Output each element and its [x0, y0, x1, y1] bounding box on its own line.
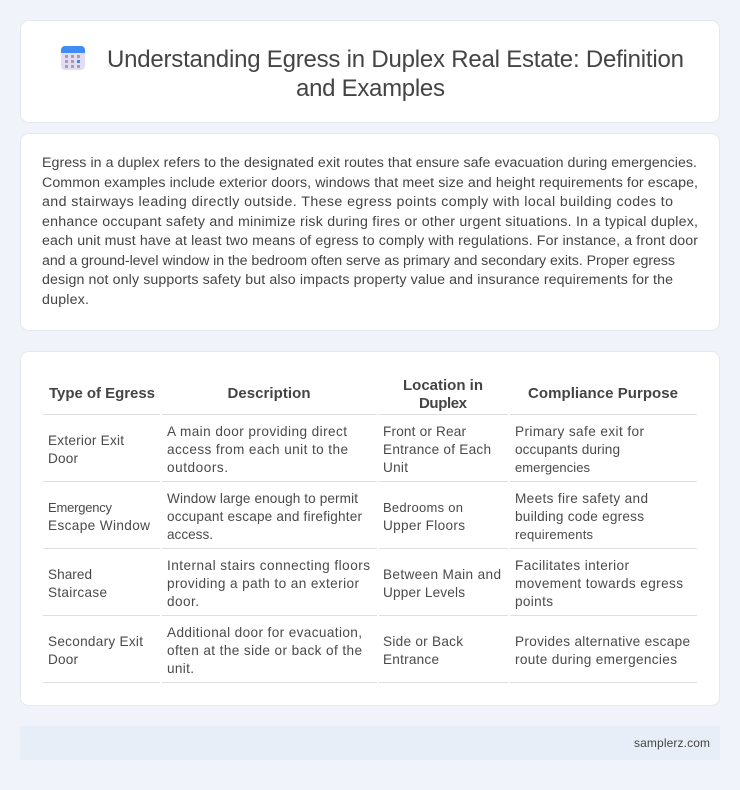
- table row: shared staircase: Between Main and: [383, 567, 501, 582]
- table row: emergency escape window: Meets fire safety and: [515, 491, 648, 506]
- table row: shared staircase: providing a path to an exterior: [167, 576, 359, 591]
- table row: exterior exit door: A main door providing direct: [167, 424, 347, 439]
- table row: secondary exit door: Door: [48, 652, 78, 667]
- table row: shared staircase: Upper Levels: [383, 585, 465, 600]
- table row: emergency escape window: Bedrooms on: [383, 500, 463, 515]
- table row: shared staircase: Internal stairs connecting floors: [167, 558, 370, 573]
- table header row: Duplex: [419, 395, 468, 412]
- text block: egress definition: and a ground-level window in the bedroom often serve as primary and secondary exits. Proper egress: [42, 253, 675, 269]
- panel: intro paragraph: [20, 134, 720, 330]
- table row: emergency escape window: Upper Floors: [383, 518, 465, 533]
- text block: egress definition: Common examples include exterior doors, windows that meet size and height requirements for escape,: [42, 175, 698, 191]
- text block: egress definition: duplex.: [42, 292, 89, 308]
- text block: egress definition: [42, 155, 698, 308]
- text block: egress definition: each unit must have at least two means of egress to comply with regulations. For instance, a front door: [42, 233, 698, 249]
- table row: shared staircase: points: [515, 594, 553, 609]
- text block: egress definition: enhance occupant safety and minimize risk during fires or other urgent situations. In a typical duplex,: [42, 214, 698, 230]
- table row: secondary exit door: route during emergencies: [515, 652, 677, 667]
- table row: emergency escape window: occupant escape and firefighter: [167, 509, 362, 524]
- table row: exterior exit door: emergencies: [515, 460, 590, 475]
- table row: emergency escape window: access.: [167, 527, 213, 542]
- table header row: Description: [228, 385, 310, 402]
- table row: secondary exit door: [48, 625, 690, 676]
- table header row: Compliance Purpose: [528, 385, 678, 402]
- table row: exterior exit door: Front or Rear: [383, 424, 466, 439]
- table row: secondary exit door: often at the side or back of the: [167, 643, 362, 658]
- footer bar: [20, 726, 720, 760]
- text block: egress definition: and stairways leading directly outside. These egress points comply with local building codes to: [42, 194, 673, 210]
- table row: secondary exit door: Secondary Exit: [48, 634, 143, 649]
- icon: calendar: [61, 46, 85, 70]
- table row: shared staircase: movement towards egress: [515, 576, 683, 591]
- table row: exterior exit door: outdoors.: [167, 460, 228, 475]
- table row: exterior exit door: Unit: [383, 460, 408, 475]
- panel: title header: [20, 20, 720, 122]
- text block: egress definition: design not only supports safety but also impacts property value and insurance requirements for the: [42, 272, 673, 288]
- table row: secondary exit door: unit.: [167, 661, 194, 676]
- panel: egress table: [20, 352, 720, 706]
- title: Understanding Egress in Duplex Real Estate: Definition: [107, 46, 684, 73]
- footer bar: samplerz.com: [634, 736, 710, 750]
- table row: shared staircase: door.: [167, 594, 199, 609]
- table header row: Type of Egress: [49, 385, 155, 402]
- table row: secondary exit door: Entrance: [383, 652, 439, 667]
- text block: egress definition: Egress in a duplex refers to the designated exit routes that ensure safe evacuation during emergencies.: [42, 155, 697, 171]
- table row: emergency escape window: Escape Window: [48, 518, 150, 533]
- title: and Examples: [296, 75, 445, 102]
- table row: shared staircase: Staircase: [48, 585, 107, 600]
- table row: exterior exit door: Primary safe exit for: [515, 424, 644, 439]
- table row: emergency escape window: Emergency: [48, 500, 112, 515]
- table row: secondary exit door: Side or Back: [383, 634, 463, 649]
- table row: shared staircase: [48, 558, 683, 609]
- table row: secondary exit door: Additional door for evacuation,: [167, 625, 362, 640]
- table row: emergency escape window: Window large enough to permit: [167, 491, 358, 506]
- table row: emergency escape window: [48, 491, 648, 542]
- title: [107, 46, 684, 102]
- table row: exterior exit door: occupants during: [515, 442, 620, 457]
- table row: exterior exit door: Entrance of Each: [383, 442, 491, 457]
- table row: emergency escape window: building code egress: [515, 509, 644, 524]
- table row: exterior exit door: Door: [48, 451, 78, 466]
- table row: secondary exit door: Provides alternative escape: [515, 634, 690, 649]
- table header row: [49, 377, 678, 412]
- table row: exterior exit door: Exterior Exit: [48, 433, 124, 448]
- table row: emergency escape window: requirements: [515, 527, 594, 542]
- table row: exterior exit door: access from each unit to the: [167, 442, 348, 457]
- table row: shared staircase: Facilitates interior: [515, 558, 629, 573]
- table row: shared staircase: Shared: [48, 567, 92, 582]
- table header row: Location in: [403, 377, 483, 394]
- table row: exterior exit door: [48, 424, 644, 475]
